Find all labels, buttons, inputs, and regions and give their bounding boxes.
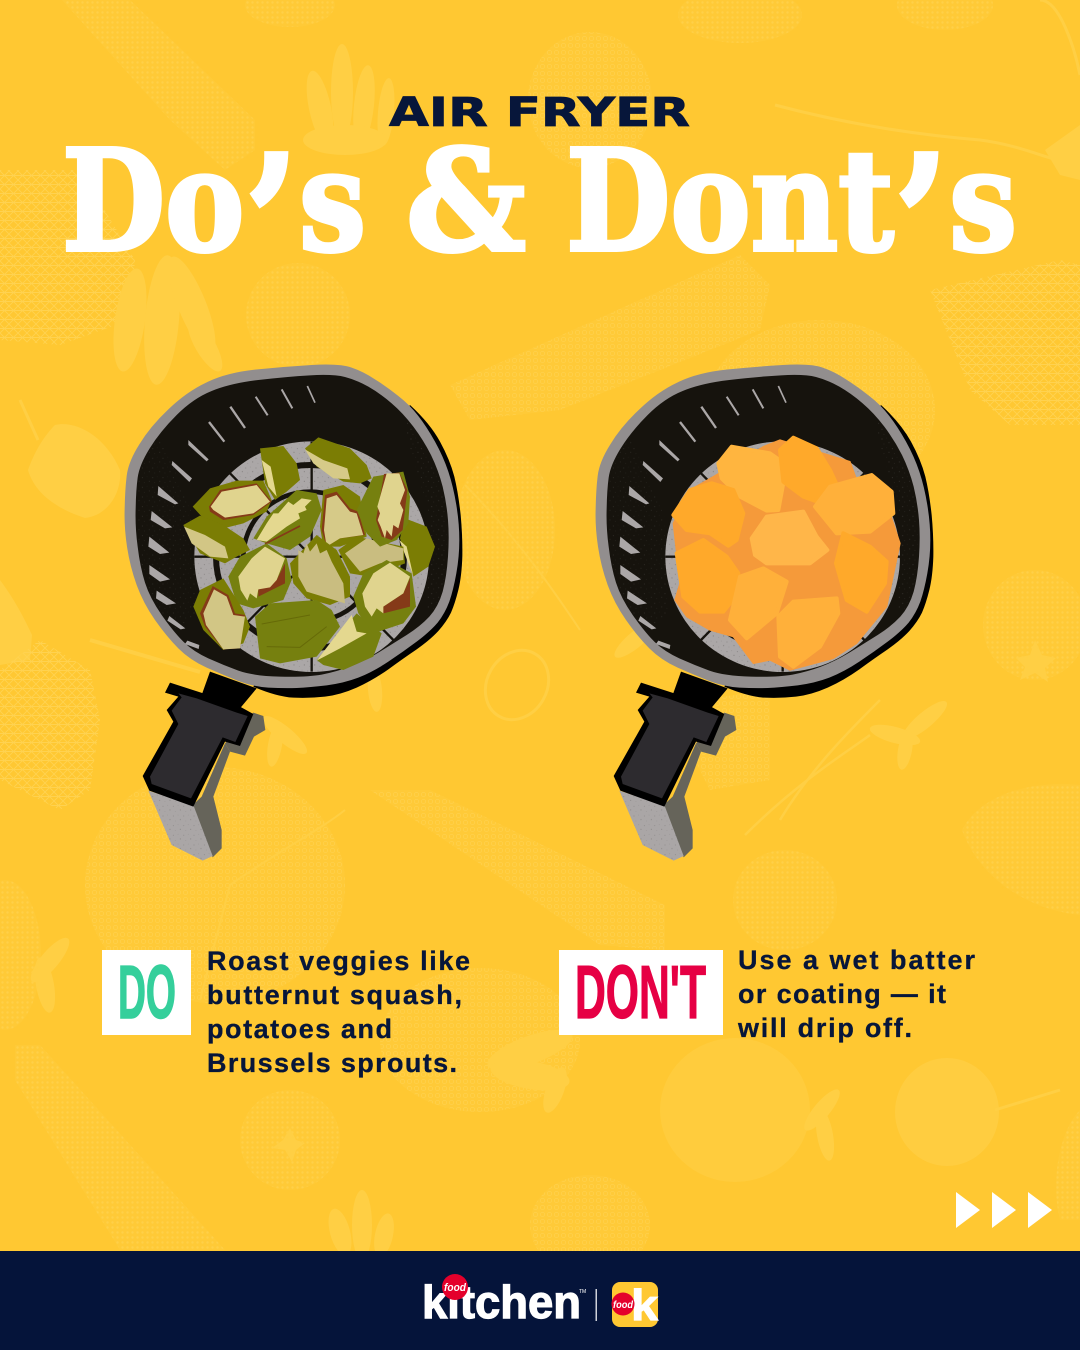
- logo: food network kitchen: k: [631, 1281, 659, 1330]
- title: s: [949, 120, 1017, 284]
- logo: food network kitchen: kitchen: [422, 1276, 581, 1328]
- do text: butternut squash,: [207, 980, 462, 1010]
- title: &: [406, 120, 526, 284]
- logo: food network kitchen: food: [613, 1300, 634, 1311]
- title: ’: [894, 114, 949, 332]
- do text: potatoes and: [207, 1014, 392, 1044]
- don't text: will drip off.: [737, 1013, 912, 1043]
- don't text: or coating — it: [738, 979, 946, 1009]
- title: Dont: [566, 120, 947, 284]
- do text: Roast veggies like: [207, 946, 470, 976]
- air fryer basket: do: [125, 365, 462, 861]
- logo: food network kitchen: food: [444, 1282, 466, 1294]
- title: s: [299, 120, 366, 284]
- logo: food network kitchen: TM: [579, 1289, 586, 1295]
- don't badge: DON'T: [575, 950, 706, 1034]
- don't badge: [559, 950, 723, 1035]
- heading: air fryer: AIR FRYER: [389, 90, 690, 136]
- do badge: [102, 950, 191, 1035]
- arrows: [956, 1192, 1052, 1228]
- do badge: DO: [118, 950, 176, 1034]
- do text: [207, 946, 470, 1078]
- air fryer basket: don't: [596, 365, 933, 861]
- don't text: Use a wet batter: [738, 945, 975, 975]
- do text: Brussels sprouts.: [207, 1048, 457, 1078]
- title: Do: [62, 120, 277, 284]
- logo: food network kitchen: [422, 1274, 659, 1330]
- food: brussels sprouts: [183, 437, 435, 670]
- title: ’: [244, 114, 299, 332]
- don't text: [737, 945, 975, 1043]
- food: battered pieces: [673, 438, 900, 670]
- footer bar: [0, 1251, 1080, 1350]
- title: [62, 114, 1017, 332]
